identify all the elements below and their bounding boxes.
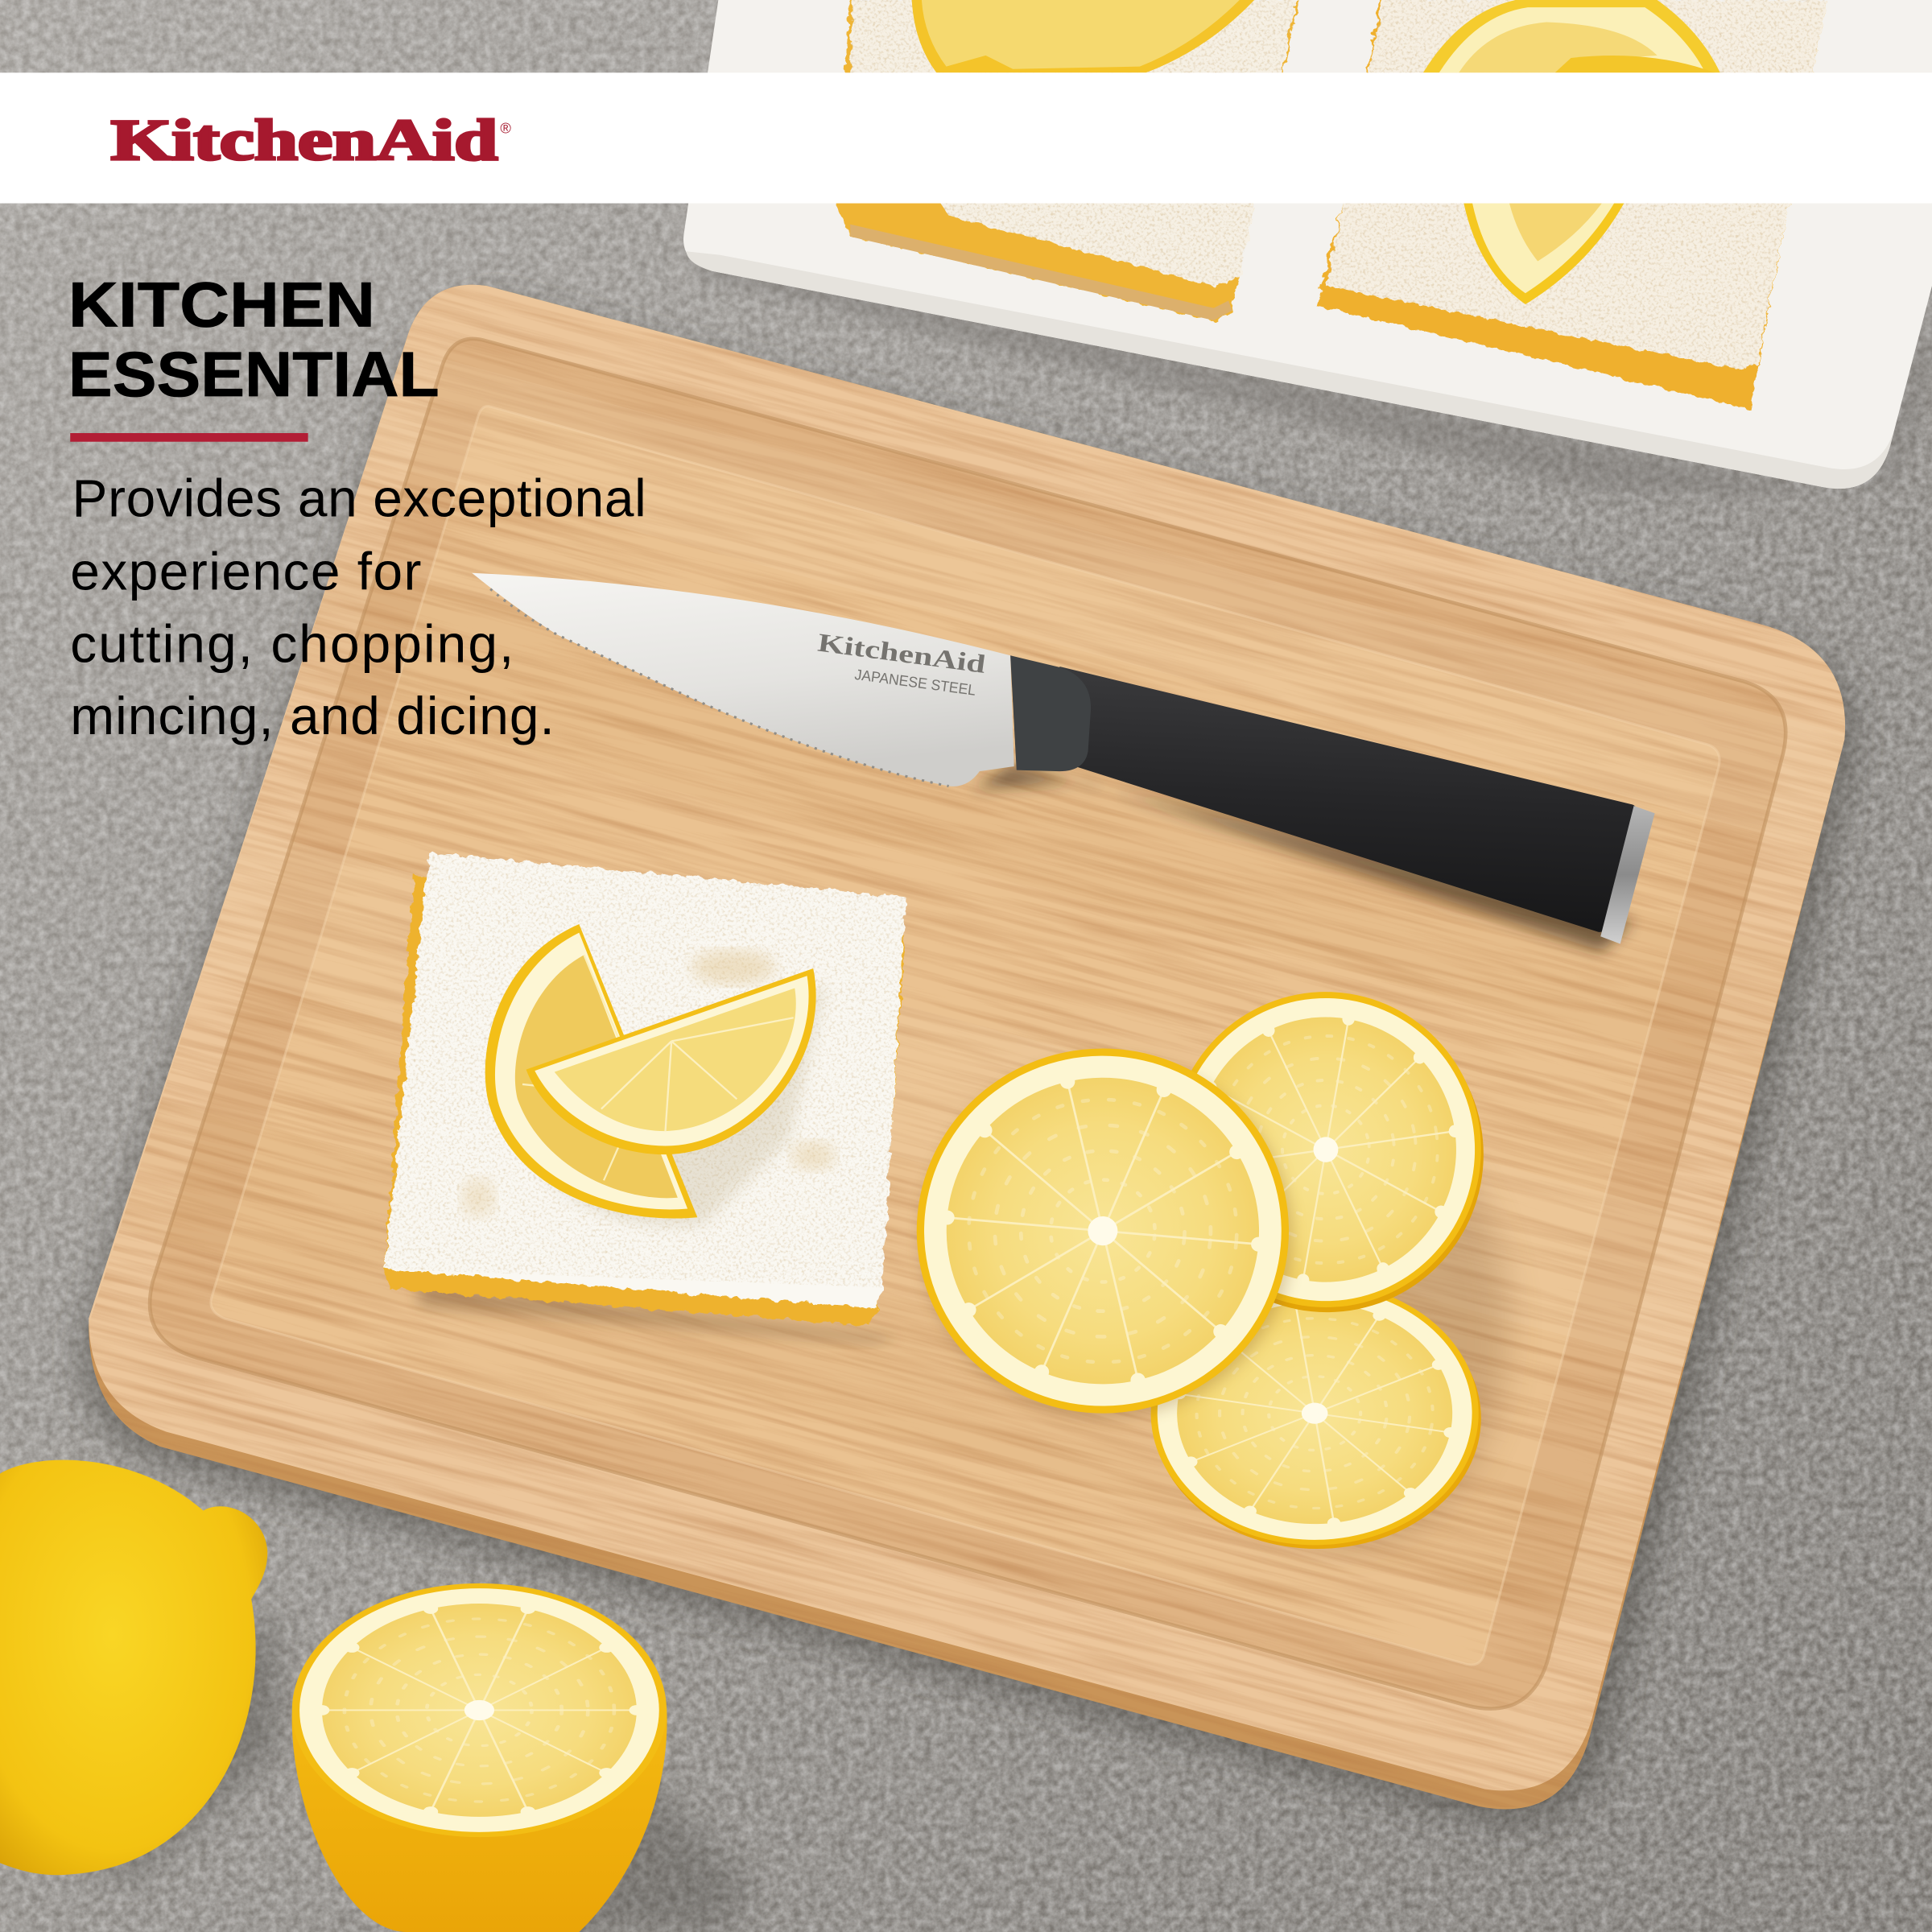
blade etched brand: JAPANESE STEEL — [853, 666, 976, 699]
wood grain — [89, 287, 1845, 1790]
header band — [0, 72, 1932, 204]
back slice — [1150, 972, 1501, 1327]
heading: ESSENTIAL — [68, 339, 440, 410]
bolster — [1010, 655, 1091, 771]
cut lemon half — [292, 1583, 752, 1932]
lower half slice — [485, 924, 697, 1219]
blade etched brand — [813, 627, 988, 700]
body text: mincing, and dicing. — [70, 686, 555, 745]
handle end cap — [1600, 806, 1655, 943]
heading — [68, 270, 440, 410]
white serving plate — [683, 0, 1932, 495]
powdered sugar top — [385, 852, 906, 1309]
lemon half slices on bar — [485, 924, 826, 1226]
heading rule — [70, 433, 308, 442]
bottom slice — [1125, 1261, 1505, 1566]
lemon bar on plate, right — [838, 0, 1836, 409]
front slice — [902, 1034, 1304, 1428]
juice groove — [150, 339, 1785, 1709]
knife shadow — [973, 766, 1633, 952]
lemon bar on board — [369, 838, 924, 1343]
blade — [472, 573, 1014, 786]
groove shading — [150, 339, 1785, 1709]
board top face — [89, 285, 1845, 1790]
rear slice shadow — [1177, 1103, 1509, 1546]
knife — [472, 573, 1655, 952]
bar base — [385, 875, 906, 1326]
KitchenAid logo: ® — [500, 119, 511, 136]
body text: cutting, chopping, — [70, 614, 514, 674]
lemon half body — [292, 1707, 667, 1932]
body text: Provides an exceptional — [72, 468, 646, 527]
upper half slice — [526, 968, 816, 1154]
board side edge — [89, 285, 1845, 1809]
heading: KITCHEN — [68, 270, 375, 341]
body text: experience for — [70, 541, 421, 601]
lemon half cut face — [292, 1583, 667, 1837]
blade etched brand: KitchenAid — [816, 627, 988, 679]
whole lemon — [0, 1460, 277, 1885]
raised centre — [211, 407, 1719, 1665]
KitchenAid logo: KitchenAid — [111, 108, 497, 172]
handle — [1059, 667, 1637, 932]
body text — [70, 468, 646, 745]
shadow — [518, 985, 826, 1226]
lemon wedges on plated bars — [912, 0, 1720, 304]
lemon slices on board — [902, 972, 1509, 1566]
serrated edge — [490, 589, 949, 786]
lemon bar on plate, left — [836, 0, 1298, 320]
board shadow — [80, 295, 1856, 1823]
